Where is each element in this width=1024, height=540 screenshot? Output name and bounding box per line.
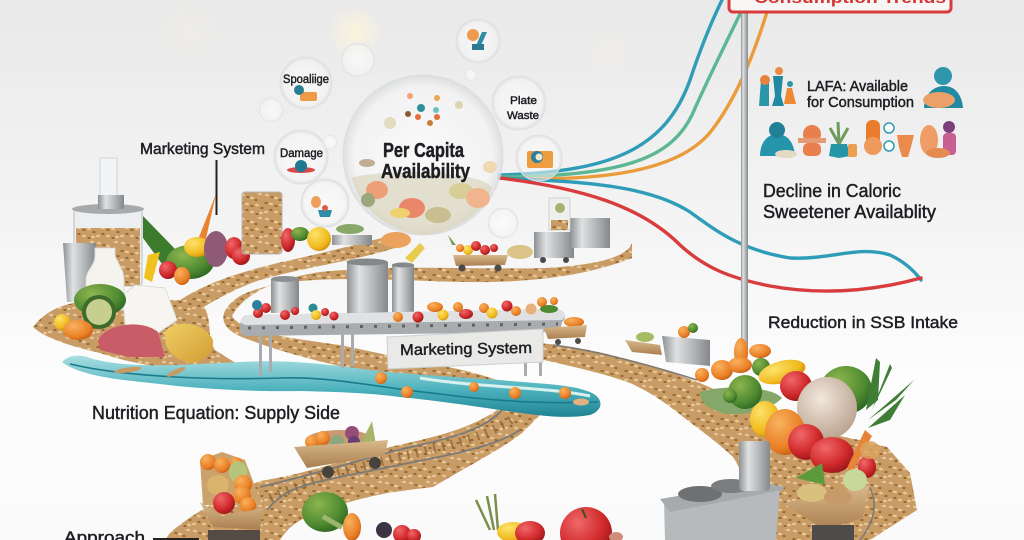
wood cart <box>453 255 508 272</box>
small cart lower <box>294 421 388 478</box>
plum <box>376 522 392 538</box>
broccoli greens <box>166 245 214 279</box>
vases <box>759 67 796 106</box>
broccoli <box>723 358 770 409</box>
legs <box>259 330 542 376</box>
stove body <box>664 488 780 540</box>
milk bottle <box>86 248 124 310</box>
grain path lower right <box>535 343 917 540</box>
light glow <box>156 0 636 76</box>
text: lafa: for Consumption <box>807 95 914 111</box>
rail ties lower left <box>270 420 511 498</box>
tan fruit <box>609 532 623 540</box>
burners <box>678 479 751 502</box>
bubble: plate waste <box>492 76 546 130</box>
metal cart <box>662 323 710 366</box>
belt bolts <box>248 324 558 328</box>
bubble: damage: Damage <box>280 148 323 160</box>
metal cup <box>63 243 96 302</box>
cans <box>271 276 299 313</box>
leeks <box>866 358 914 428</box>
lafa icons <box>759 67 963 158</box>
person bowl <box>760 122 797 158</box>
vegetables on upper path <box>143 192 425 285</box>
yellow fruit <box>750 401 780 437</box>
bubble: unlabelled food <box>301 179 349 227</box>
river wave <box>62 356 600 417</box>
sign: consumption trends <box>729 0 951 12</box>
carrot <box>847 430 872 472</box>
bread <box>165 324 213 363</box>
cart lower left <box>200 452 263 540</box>
couple <box>920 121 956 158</box>
leaves <box>143 216 176 268</box>
floating fruit <box>114 366 589 406</box>
red pepper <box>281 228 295 252</box>
pointer line <box>153 538 199 540</box>
empty bubbles <box>259 43 518 238</box>
orange <box>184 237 210 257</box>
tomato <box>560 507 612 540</box>
bubble: spoilage <box>280 57 332 109</box>
leeks <box>476 494 498 530</box>
blue falling line <box>500 178 921 280</box>
grain path upper <box>170 236 395 322</box>
red falling line <box>500 178 921 291</box>
yellow pepper <box>756 355 808 389</box>
red pepper <box>225 237 243 259</box>
carts upper right <box>448 198 610 272</box>
red pepper big <box>810 437 854 473</box>
tomato <box>159 261 177 279</box>
second jar <box>242 192 282 254</box>
purple vegetable <box>204 231 228 267</box>
vegetables bottom <box>302 492 623 540</box>
bubble: damage <box>274 130 328 184</box>
text: caloric sweetener: Sweetener Availablity <box>763 202 936 222</box>
leafy base <box>74 284 126 316</box>
jar lid <box>72 204 144 214</box>
fruit <box>448 235 498 255</box>
tall can <box>392 262 414 319</box>
food inside bubble <box>352 159 497 235</box>
small metal cart <box>332 224 372 245</box>
metal cart <box>534 232 574 263</box>
orange rising line <box>500 12 767 179</box>
red tomato <box>232 247 250 265</box>
cart behind conveyor <box>544 317 587 345</box>
orange fruit <box>497 522 529 540</box>
rail right <box>553 345 874 540</box>
cartons <box>123 285 177 335</box>
large can <box>346 258 388 320</box>
trend lines <box>500 0 921 291</box>
bubble: plate waste: Waste <box>507 110 539 122</box>
stove top <box>660 482 785 512</box>
food icons <box>864 120 914 157</box>
red fruit <box>858 456 876 478</box>
broccoli right <box>820 366 872 414</box>
bubble: per capita availability <box>343 75 503 235</box>
bubble: utensils <box>456 19 500 63</box>
heading: supply side: Nutrition Equation: Supply Side <box>92 403 340 423</box>
cart right <box>783 463 870 540</box>
side goods <box>507 245 533 259</box>
canister <box>739 441 770 491</box>
left jars and dairy <box>54 158 213 363</box>
tomato <box>63 320 93 340</box>
belt <box>240 309 565 336</box>
plant <box>829 122 857 158</box>
pepper <box>515 521 545 540</box>
blue rising line <box>500 0 724 175</box>
carrots <box>343 513 361 540</box>
orange tomato <box>765 409 805 455</box>
red pepper <box>780 371 812 401</box>
bubble: plate icon <box>516 135 562 181</box>
steak <box>98 324 165 357</box>
pointer line <box>216 160 218 215</box>
jar neck <box>98 195 124 209</box>
text: lafa <box>807 79 914 111</box>
orange mound <box>381 232 411 248</box>
jar grain <box>76 228 140 286</box>
bubble: plate waste: Plate <box>510 95 537 107</box>
belt fruit <box>252 297 558 322</box>
round figure <box>798 125 826 156</box>
green rising line <box>500 12 741 177</box>
bubble: per capita availability: Availability <box>381 161 471 183</box>
leaf plate <box>700 387 782 414</box>
carts right <box>625 323 710 366</box>
orange fruit <box>307 227 331 251</box>
text: caloric sweetener: Decline in Caloric <box>763 181 901 201</box>
metal bin <box>570 218 610 248</box>
orange <box>174 267 190 285</box>
corn <box>405 243 425 263</box>
broccoli <box>302 492 348 532</box>
text: lafa: LAFA: Available <box>807 79 908 95</box>
cucumber <box>82 295 116 329</box>
red peppers <box>393 525 421 540</box>
conveyor <box>240 258 565 376</box>
sign: marketing system <box>387 329 543 369</box>
title text: Per Capita <box>383 140 465 162</box>
stove <box>660 441 785 540</box>
tan goods <box>860 441 880 459</box>
grain pile left <box>33 300 242 370</box>
grain path lower left <box>165 408 545 540</box>
big jar <box>74 208 142 286</box>
grain path middle <box>223 243 632 420</box>
text: caloric sweetener <box>763 181 936 222</box>
tall tube <box>100 158 117 198</box>
yellow pepper <box>144 252 160 282</box>
carrots <box>695 338 771 382</box>
wood cart <box>625 332 662 355</box>
rails lower left <box>260 410 520 510</box>
text: ssb: Reduction in SSB Intake <box>768 313 958 332</box>
sign: marketing system: Marketing System <box>400 340 532 359</box>
lemon <box>54 314 70 330</box>
heading: marketing system: Marketing System <box>140 141 265 158</box>
icons inside bubble <box>384 93 463 129</box>
red pepper <box>788 424 824 460</box>
cabbage <box>797 377 857 439</box>
vegetables right <box>695 338 914 540</box>
bubble: spoilage: Spoaliige <box>283 74 329 86</box>
greens <box>291 227 309 241</box>
carrot <box>197 194 216 243</box>
belt top <box>241 309 565 325</box>
person with pizza <box>923 67 963 108</box>
sign post <box>741 10 748 350</box>
glass on cart <box>549 198 570 230</box>
